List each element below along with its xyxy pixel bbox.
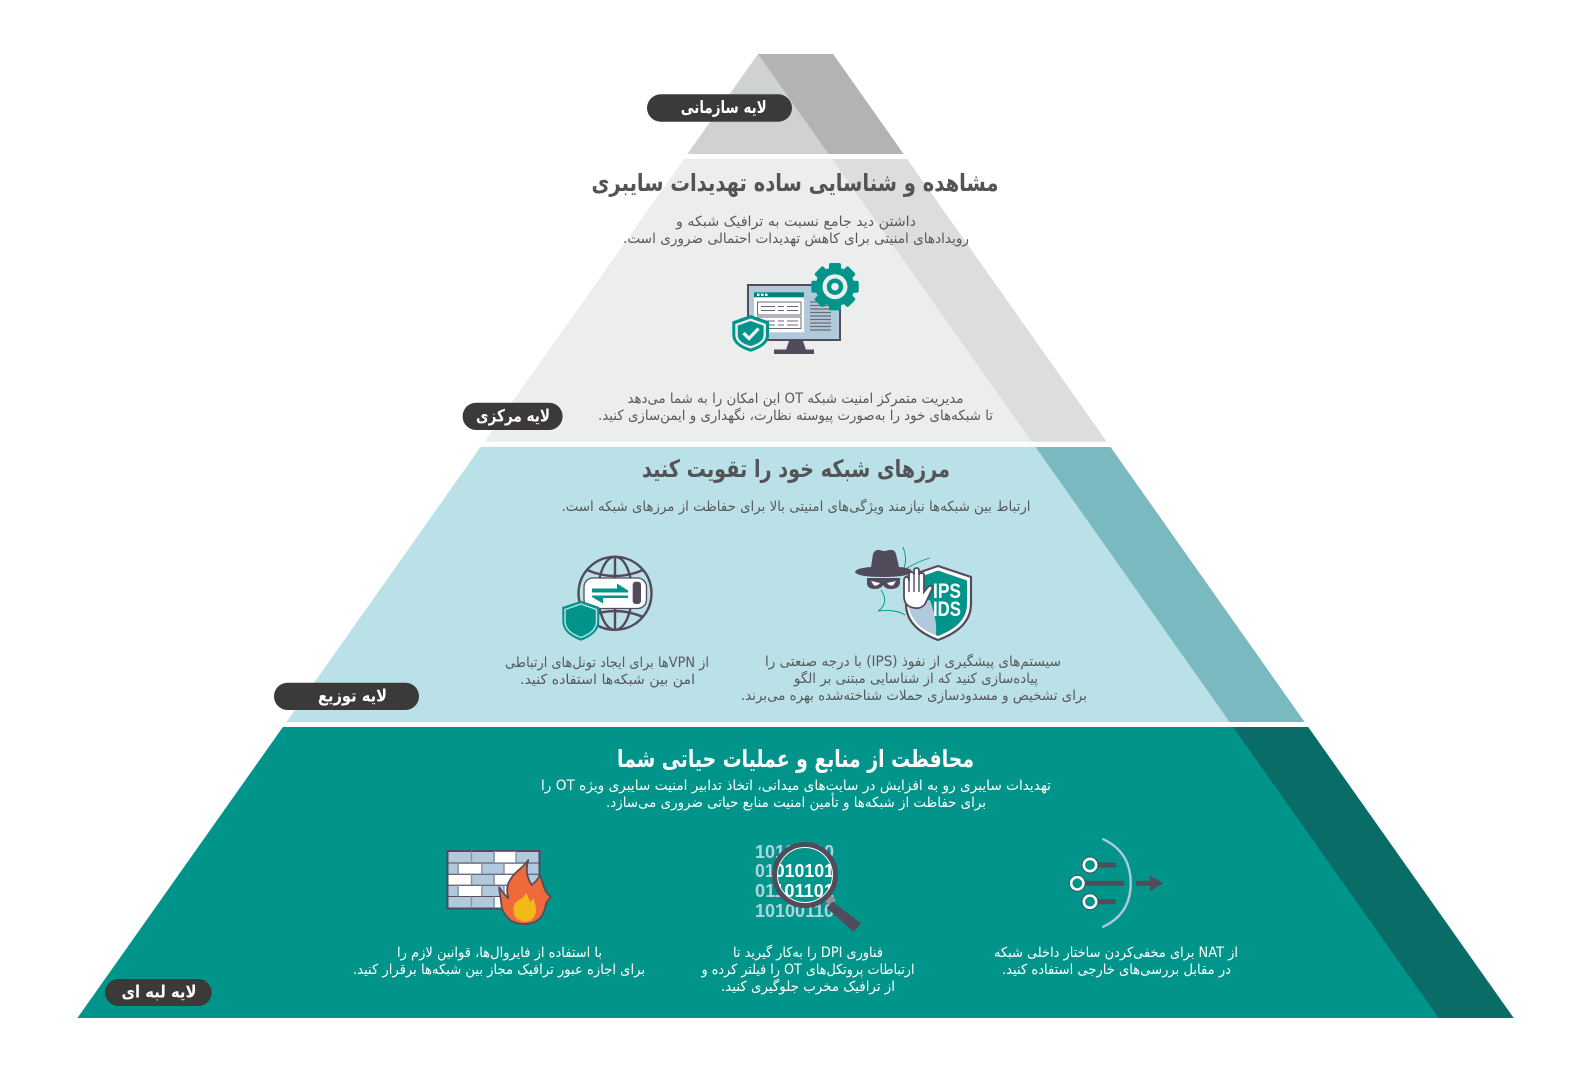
label: edge layer <box>105 979 212 1006</box>
text block: firewall description: برای اجازه عبور ترافیک مجاز بین شبکه‌ها برقرار کنید. <box>353 962 645 978</box>
text block: DPI description <box>701 944 914 995</box>
icon: globe with VPN tunnel and shield <box>562 557 652 641</box>
text block: NAT description <box>994 945 1238 978</box>
text block: distribution intro: ارتباط بین شبکه‌ها نیازمند ویژگی‌های امنیتی بالا برای حفاظت از مرزهای شبکه است. <box>562 498 1030 515</box>
icon: deep packet inspection magnifier: 01101101 <box>755 880 834 901</box>
text block: DPI description: از ترافیک مخرب جلوگیری کنید. <box>721 978 895 995</box>
text block: firewall description <box>353 945 645 978</box>
text block: firewall description: با استفاده از فایروال‌ها، قوانین لازم را <box>397 945 602 961</box>
panel: central layer <box>484 159 1107 442</box>
label: IDS: IDS <box>933 598 961 621</box>
text block: edge intro: برای حفاظت از شبکه‌ها و تأمین امنیت منابع حیاتی ضروری می‌سازد. <box>606 792 986 811</box>
heading: distribution layer: مرزهای شبکه خود را تقویت کنید <box>642 455 950 483</box>
text block: NAT description: از NAT برای مخفی‌کردن ساختار داخلی شبکه <box>994 945 1238 961</box>
label: distribution layer <box>274 683 419 710</box>
heading: central layer: مشاهده و شناسایی ساده تهدیدات سایبری <box>592 169 998 197</box>
text block: VPN description: از VPNها برای ایجاد تونل‌های ارتباطی <box>505 655 709 671</box>
icon: deep packet inspection magnifier: 01101101 <box>755 880 834 901</box>
text block: central intro: داشتن دید جامع نسبت به ترافیک شبکه و <box>675 214 916 230</box>
label: edge layer: لایه لبه ای <box>122 982 196 1002</box>
icon: deep packet inspection magnifier: 10100110 <box>755 841 834 862</box>
text block: DPI description: فناوری DPI را به‌کار گیرید تا <box>733 944 883 961</box>
icon: deep packet inspection magnifier: 01010101 <box>755 860 834 881</box>
text block: VPN description: امن بین شبکه‌ها استفاده کنید. <box>520 672 695 688</box>
label: IPS: IPS <box>933 580 961 603</box>
text block: IPS description <box>741 653 1087 704</box>
text block: NAT description: در مقابل بررسی‌های خارجی استفاده کنید. <box>1002 962 1231 978</box>
icon: deep packet inspection magnifier <box>755 841 861 932</box>
text block: IPS description: سیستم‌های پیشگیری از نفوذ (IPS) با درجه صنعتی را <box>765 653 1061 670</box>
icon: NAT network address translation <box>1069 839 1163 927</box>
text block: VPN description <box>505 655 709 688</box>
text block: edge intro <box>541 778 1051 811</box>
label: organizational layer: لایه سازمانی <box>681 98 767 118</box>
text block: IPS description: پیاده‌سازی کنید که از شناسایی مبتنی بر الگو <box>793 670 1038 687</box>
label: central layer: لایه مرکزی <box>476 406 550 426</box>
icon: firewall with flame <box>448 851 551 924</box>
panel: edge layer <box>77 727 1514 1018</box>
text block: central management: تا شبکه‌های خود را به‌صورت پیوسته نظارت، نگهداری و ایمن‌سازی کنید. <box>598 407 993 424</box>
label: organizational layer <box>647 94 792 122</box>
panel: organizational layer <box>687 54 904 154</box>
text block: edge intro: تهدیدات سایبری رو به افزایش در سایت‌های میدانی، اتخاذ تدابیر امنیت سایبری ویژه OT را <box>541 778 1051 794</box>
icon: monitor with gear and shield <box>732 263 859 354</box>
text block: central management <box>598 391 993 424</box>
label: distribution layer: لایه توزیع <box>318 686 387 706</box>
text block: central intro <box>623 214 969 247</box>
panel: distribution layer <box>286 447 1305 722</box>
text block: DPI description: ارتباطات پروتکل‌های OT را فیلتر کرده و <box>701 962 914 978</box>
icon: deep packet inspection magnifier: 10100110 <box>755 900 834 921</box>
icon: spy and IPS IDS shield <box>855 547 971 640</box>
text block: IPS description: برای تشخیص و مسدودسازی حملات شناخته‌شده بهره می‌برند. <box>741 688 1087 704</box>
text block: central management: مدیریت متمرکز امنیت شبکه OT این امکان را به شما می‌دهد <box>628 391 964 407</box>
label: central layer <box>463 403 563 430</box>
text block: central intro: رویدادهای امنیتی برای کاهش تهدیدات احتمالی ضروری است. <box>623 231 969 247</box>
icon: deep packet inspection magnifier: 01010101 <box>755 860 834 881</box>
heading: edge layer: محافظت از منابع و عملیات حیاتی شما <box>617 745 974 773</box>
